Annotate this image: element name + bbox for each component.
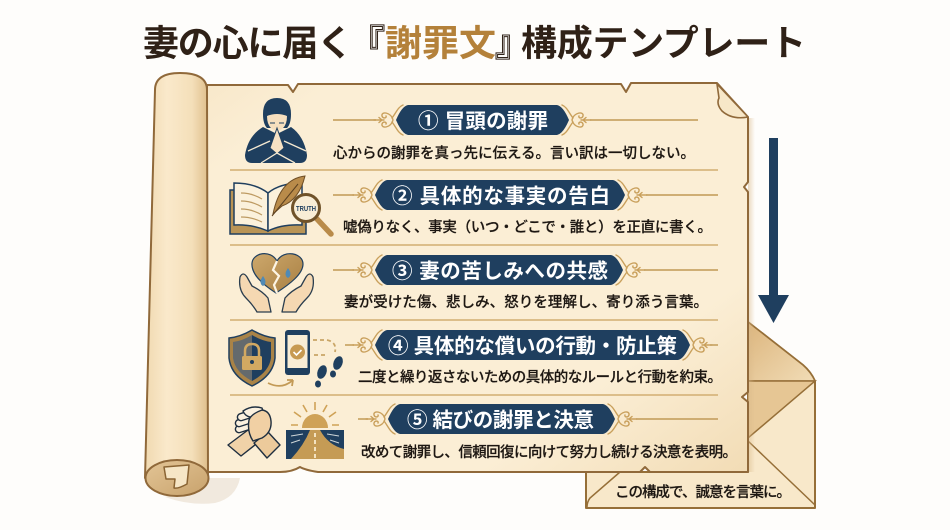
section 1 [245, 98, 698, 163]
icon: clasped hands [228, 407, 280, 458]
connector and ornaments [333, 180, 718, 210]
curled corner [717, 84, 748, 118]
title: 』 [495, 22, 531, 64]
heading pill 2 [375, 180, 625, 210]
description 5: 改めて謝罪し、信頼回復に向けて努力し続ける決意を表明。 [361, 443, 737, 461]
title [143, 22, 806, 64]
section dividers [230, 170, 718, 395]
heading pill 2: ② 具体的な事実の告白 [392, 185, 610, 208]
connector and ornaments [333, 255, 718, 285]
icon: shield with padlock [229, 330, 275, 386]
description 1: 心からの謝罪を真っ先に伝える。言い訳は一切しない。 [333, 144, 695, 162]
icon: phone with check and path [268, 330, 335, 386]
connector and ornaments [358, 404, 718, 434]
connector and ornaments [345, 330, 718, 360]
section 5 [228, 402, 737, 461]
title: 『 [349, 22, 385, 64]
heading pill 3 [375, 255, 623, 285]
section 3 [240, 254, 718, 312]
description 2: 嘘偽りなく、事実（いつ・どこで・誰と）を正直に書く。 [343, 219, 712, 236]
icon: broken heart in hands [240, 254, 313, 312]
envelope caption: この構成で、誠意を言葉に。 [615, 483, 791, 501]
connector and ornaments [333, 105, 698, 135]
heading pill 4: ④ 具体的な償いの行動・防止策 [388, 335, 678, 358]
scroll paper [165, 83, 755, 504]
title: 妻の心に届く [143, 22, 353, 64]
title: 構成テンプレート [521, 22, 806, 64]
heading pill 1: ① 冒頭の謝罪 [418, 110, 548, 133]
heading pill 5 [388, 404, 615, 434]
heading pill 5: ⑤ 結びの謝罪と決意 [407, 409, 594, 432]
title: 謝罪文 [385, 22, 496, 64]
icon: praying person [245, 98, 307, 163]
description 3: 妻が受けた傷、悲しみ、怒りを理解し、寄り添う言葉。 [344, 293, 708, 311]
icon: open book with quill and magnifier: TRUTH [296, 206, 316, 213]
section 2 [230, 176, 718, 236]
description 4: 二度と繰り返さないための具体的なルールと行動を約束。 [358, 369, 722, 386]
envelope [586, 322, 815, 508]
icon: open book with quill and magnifier [230, 176, 331, 234]
heading pill 1 [396, 105, 569, 135]
icon: sunrise over road [286, 402, 344, 459]
section 4 [229, 330, 722, 388]
scroll roll [145, 73, 208, 496]
arrow: reading direction [758, 138, 789, 323]
icon: footprints [315, 355, 345, 388]
heading pill 3: ③ 妻の苦しみへの共感 [392, 259, 608, 283]
